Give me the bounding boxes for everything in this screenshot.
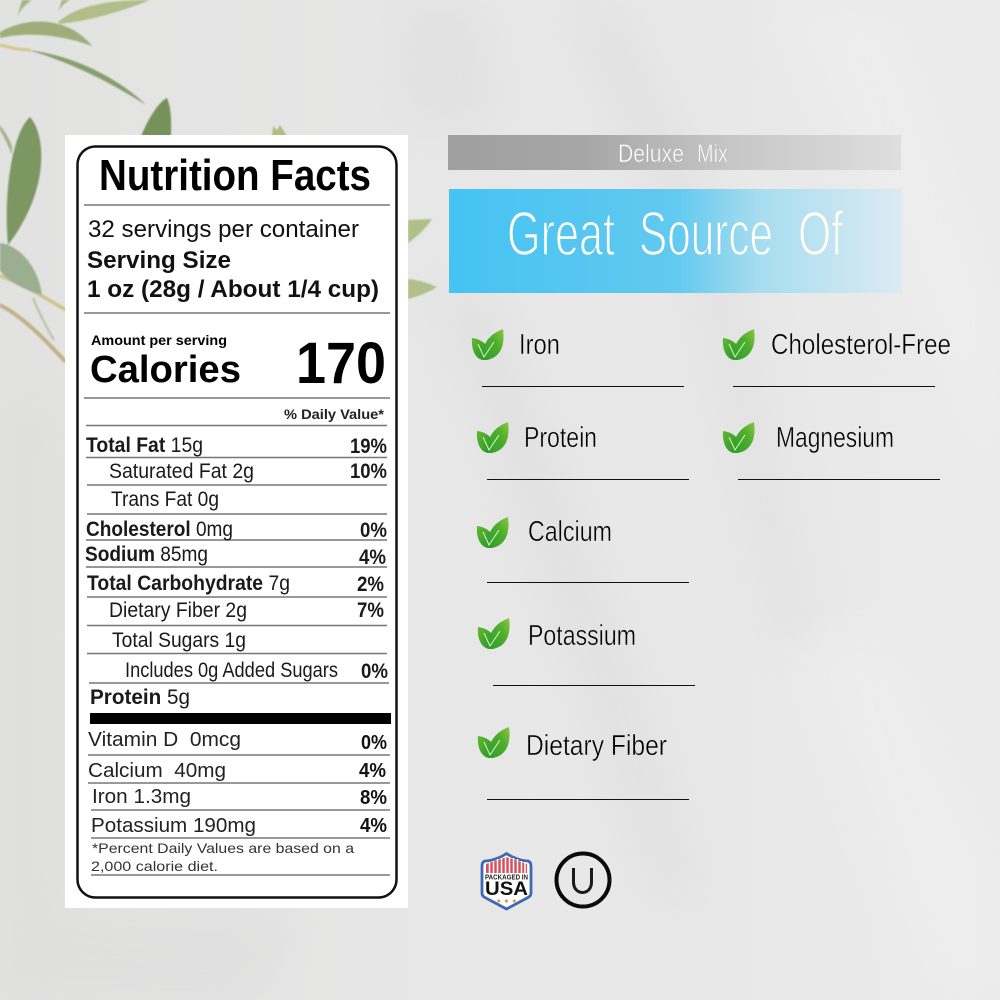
list item: Magnesium: Magnesium [776, 422, 894, 454]
banner: Great Source Of: Source [639, 200, 773, 269]
serving information: 32 servings per container [88, 216, 359, 243]
list item: Protein: Protein [524, 422, 597, 454]
nutrient rows: Protein 5g [90, 686, 190, 709]
nutrient rows: 4% [359, 546, 386, 569]
list item: Cholesterol-Free [723, 329, 951, 387]
list item: Iron: Iron [519, 329, 560, 361]
heading: Nutrition Facts: Nutrition Facts [99, 151, 371, 200]
footnote [91, 840, 354, 874]
vitamins and minerals: 4% [359, 759, 386, 782]
nutrient rows: Includes 0g Added Sugars [125, 659, 338, 682]
vitamins and minerals: Potassium 190mg [91, 814, 256, 837]
list item: Cholesterol-Free: Cholesterol-Free [771, 329, 951, 361]
vitamins and minerals: 4% [360, 814, 387, 837]
calories [90, 331, 386, 396]
calories: 170 [296, 331, 386, 396]
icon: kosher circled U [556, 854, 610, 906]
vitamins and minerals: 8% [360, 786, 387, 809]
nutrient rows: 2% [357, 573, 384, 596]
nutrient rows: Cholesterol 0mg [86, 518, 233, 541]
nutrient rows: 0% [361, 660, 388, 683]
vitamins and minerals: Vitamin D 0mcg [88, 728, 241, 751]
calories: Calories [90, 349, 241, 391]
nutrient rows [85, 434, 388, 709]
vitamins and minerals [88, 728, 387, 837]
nutrient rows: 7% [357, 599, 384, 622]
footnote: *Percent Daily Values are based on a [92, 840, 354, 856]
list item: Potassium [478, 618, 695, 686]
nutrient rows: 10% [350, 460, 387, 483]
list item: Protein [477, 422, 689, 480]
banner: Great Source Of: Of [798, 200, 844, 269]
decorative olive branch [0, 0, 437, 362]
banner: Great Source Of [449, 189, 902, 293]
banner: Deluxe Mix [448, 135, 901, 170]
list item: Dietary Fiber [478, 727, 689, 800]
list item: Magnesium [723, 422, 940, 480]
nutrient rows: Total Fat 15g [86, 434, 203, 457]
nutrient rows: Sodium 85mg [85, 543, 208, 566]
daily value header: % Daily Value* [284, 406, 385, 422]
nutrient rows: Dietary Fiber 2g [109, 599, 247, 622]
thick divider [90, 713, 391, 724]
nutrient rows: Total Carbohydrate 7g [87, 572, 290, 595]
serving information: Serving Size [87, 247, 231, 274]
nutrient rows: Trans Fat 0g [111, 488, 219, 511]
icon: Packaged in USA badge: ★★★ [496, 898, 517, 905]
vitamins and minerals: 0% [361, 731, 387, 754]
list item: Iron [472, 329, 684, 387]
banner: Deluxe Mix: Mix [697, 140, 728, 168]
icon: Packaged in USA badge: PACKAGED IN [485, 872, 528, 882]
list item: Calcium: Calcium [528, 516, 612, 548]
list item: Dietary Fiber: Dietary Fiber [526, 730, 667, 762]
list item: Potassium: Potassium [528, 620, 636, 652]
serving information [87, 216, 379, 303]
nutrient rows: Saturated Fat 2g [109, 460, 254, 483]
nutrient rows: Total Sugars 1g [112, 629, 246, 652]
panel: nutrition facts label [65, 135, 408, 908]
vitamins and minerals: Calcium 40mg [88, 759, 226, 782]
serving information: 1 oz (28g / About 1/4 cup) [87, 276, 379, 303]
icon: Packaged in USA badge: USA [485, 879, 528, 900]
icon: Packaged in USA badge [482, 854, 531, 909]
footnote: 2,000 calorie diet. [91, 858, 218, 874]
nutrient rows: 0% [360, 519, 387, 542]
calories: Amount per serving [91, 333, 227, 348]
nutrient rows: 19% [350, 435, 387, 458]
list item: Calcium [477, 516, 689, 583]
vitamins and minerals: Iron 1.3mg [92, 785, 191, 808]
banner: Deluxe Mix: Deluxe [618, 140, 684, 168]
banner: Great Source Of: Great [507, 200, 615, 269]
